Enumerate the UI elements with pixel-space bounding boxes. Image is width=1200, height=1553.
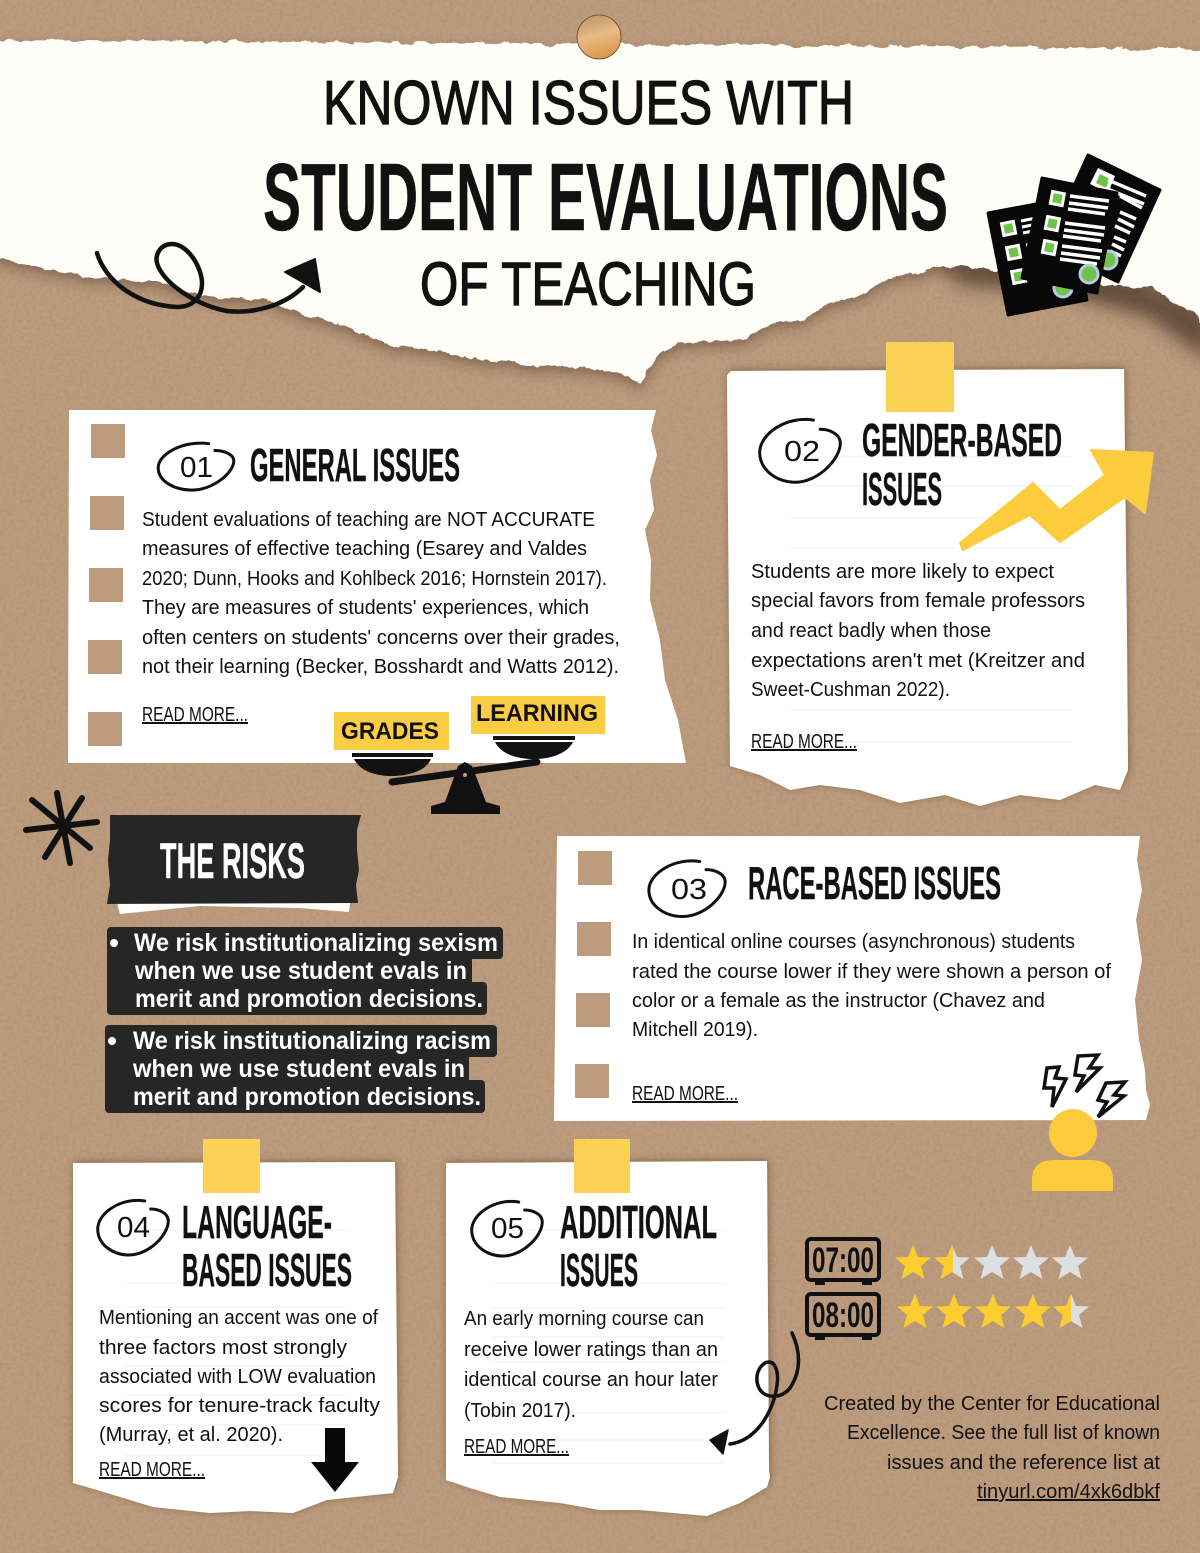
- read more 04: READ MORE...: [99, 1459, 205, 1481]
- icon: clocks with star ratings: [807, 1239, 1089, 1340]
- body text 05: (Tobin 2017).: [464, 1400, 576, 1422]
- risk callout: sexism: [107, 927, 503, 1015]
- body text 04: three factors most strongly: [99, 1337, 347, 1359]
- risk callout: sexism: We risk institutionalizing sexism: [134, 929, 498, 957]
- body text 03: color or a female as the instructor (Chavez and: [632, 990, 1045, 1012]
- body text 01: 2020; Dunn, Hooks and Kohlbeck 2016; Hornstein 2017).: [142, 568, 607, 590]
- credit text: Created by the Center for Educational: [824, 1393, 1160, 1415]
- body text 03: Mitchell 2019).: [632, 1019, 758, 1041]
- body text 05: receive lower ratings than an: [464, 1339, 718, 1361]
- read more 05: READ MORE...: [464, 1436, 569, 1458]
- ruled lines 02: [790, 457, 1072, 742]
- panel: gender-based issues: [727, 342, 1153, 806]
- risk callout: sexism: merit and promotion decisions.: [135, 985, 483, 1013]
- heading 04: [182, 1196, 352, 1296]
- body text 03: In identical online courses (asynchronous) students: [632, 931, 1075, 953]
- body text 04: (Murray, et al. 2020).: [99, 1424, 283, 1446]
- title: OF TEACHING: [420, 250, 756, 318]
- note paper 03: [554, 836, 1150, 1121]
- body text 01: They are measures of students' experiences, which: [142, 597, 589, 619]
- body text 04: [99, 1307, 380, 1446]
- clock 07:00: [807, 1239, 879, 1285]
- shadow under torn header: [940, 262, 1200, 362]
- body text 02: [751, 561, 1085, 701]
- clock 08:00: 08:00: [812, 1296, 874, 1335]
- body text 02: special favors from female professors: [751, 590, 1085, 612]
- panel: additional issues: [446, 1139, 798, 1516]
- icon: balance scale grades vs learning: [334, 696, 605, 814]
- body text 03: rated the course lower if they were shown a person of: [632, 961, 1111, 983]
- icon: swirl arrow: [97, 244, 320, 312]
- heading: the risks tape: THE RISKS: [160, 833, 305, 889]
- stars: high rating: [897, 1294, 1089, 1328]
- heading 02: [862, 414, 1062, 515]
- heading: the risks tape: [107, 815, 361, 914]
- heading 04: LANGUAGE-: [182, 1196, 332, 1248]
- number circle 04: 04: [117, 1212, 150, 1244]
- number circle 05: [472, 1201, 542, 1256]
- body text 01: measures of effective teaching (Esarey and Valdes: [142, 538, 587, 560]
- body text 05: [464, 1308, 718, 1422]
- risk callout: racism: merit and promotion decisions.: [133, 1083, 481, 1111]
- panel: language-based issues: [73, 1139, 398, 1513]
- number circle 04: [98, 1200, 168, 1255]
- note paper 05: [446, 1161, 770, 1516]
- clock 08:00: [807, 1294, 879, 1340]
- heading 05: ADDITIONAL: [560, 1196, 717, 1248]
- icon: balance scale grades vs learning: LEARNING: [476, 700, 598, 727]
- note paper 04: [73, 1162, 398, 1513]
- number circle 02: 02: [784, 436, 820, 468]
- panel: language-based issues: BASED ISSUES: [182, 1244, 352, 1296]
- panel: general issues: [68, 410, 686, 763]
- credit text: tinyurl.com/4xk6dbkf: [977, 1481, 1160, 1503]
- body text 04: scores for tenure-track faculty: [99, 1395, 380, 1417]
- body text 01: often centers on students' concerns over their grades,: [142, 627, 620, 649]
- body text 04: associated with LOW evaluation: [99, 1366, 376, 1388]
- icon: rising zigzag arrow: [960, 450, 1153, 550]
- title: [263, 69, 948, 318]
- body text 04: Mentioning an accent was one of: [99, 1307, 378, 1329]
- number circle 03: [649, 861, 725, 917]
- pin: [577, 15, 621, 59]
- icon: evaluation forms: [988, 155, 1160, 315]
- body text 02: Sweet-Cushman 2022).: [751, 679, 950, 701]
- panel: race-based issues: [554, 836, 1150, 1121]
- clock 07:00: 07:00: [812, 1241, 874, 1280]
- risk callout: racism: [105, 1025, 497, 1113]
- heading 01: GENERAL ISSUES: [250, 439, 460, 491]
- heading 02: ISSUES: [862, 463, 942, 515]
- body text 05: An early morning course can: [464, 1308, 704, 1330]
- note paper 01: [68, 410, 686, 763]
- read more 03: READ MORE...: [632, 1083, 738, 1105]
- middle form: [1022, 178, 1117, 293]
- tape 04: [203, 1139, 260, 1193]
- body text 02: and react badly when those: [751, 620, 991, 642]
- risk callout: racism: We risk institutionalizing racism: [133, 1027, 491, 1055]
- torn white header paper: [0, 40, 1200, 382]
- ruled lines 04: [125, 1230, 350, 1455]
- icon: stressed person with lightning bolts: [1032, 1055, 1125, 1191]
- icon: down arrow: [311, 1428, 359, 1492]
- body text 05: identical course an hour later: [464, 1369, 718, 1391]
- heading 05: [560, 1196, 717, 1296]
- number circle 03: 03: [671, 874, 707, 906]
- read more 02: READ MORE...: [751, 731, 857, 753]
- front form: [988, 198, 1087, 315]
- risk callout: racism: when we use student evals in: [132, 1055, 465, 1083]
- read more 01: READ MORE...: [142, 704, 248, 726]
- number circle 01: 01: [180, 452, 213, 484]
- binder holes: [88, 424, 125, 746]
- icon: curved arrow: [710, 1333, 798, 1454]
- credit text: Excellence. See the full list of known: [847, 1422, 1160, 1444]
- binder holes: [575, 851, 612, 1098]
- tape 05: [574, 1139, 630, 1193]
- ruled lines 05: [490, 1230, 725, 1463]
- body text 01: Student evaluations of teaching are NOT ACCURATE: [142, 509, 595, 531]
- number circle 05: 05: [491, 1213, 524, 1245]
- heading 05: ISSUES: [560, 1244, 638, 1296]
- body text 03: [632, 931, 1111, 1041]
- note paper 02: [727, 369, 1128, 806]
- number circle 01: [158, 443, 234, 490]
- body text 01: not their learning (Becker, Bosshardt and Watts 2012).: [142, 656, 619, 678]
- title: KNOWN ISSUES WITH: [323, 69, 854, 138]
- body text 02: Students are more likely to expect: [751, 561, 1054, 583]
- credit text: issues and the reference list at: [887, 1452, 1160, 1474]
- credit text: [824, 1393, 1160, 1503]
- tape 02: [886, 342, 954, 412]
- icon: balance scale grades vs learning: GRADES: [341, 718, 439, 745]
- stars: low rating: [895, 1245, 1088, 1279]
- body text 01: [142, 509, 620, 678]
- risk callout: sexism: when we use student evals in: [134, 957, 467, 985]
- icon: asterisk: [26, 793, 97, 863]
- number circle 02: [760, 419, 840, 482]
- body text 02: expectations aren't met (Kreitzer and: [751, 650, 1085, 672]
- back form: [1046, 155, 1160, 282]
